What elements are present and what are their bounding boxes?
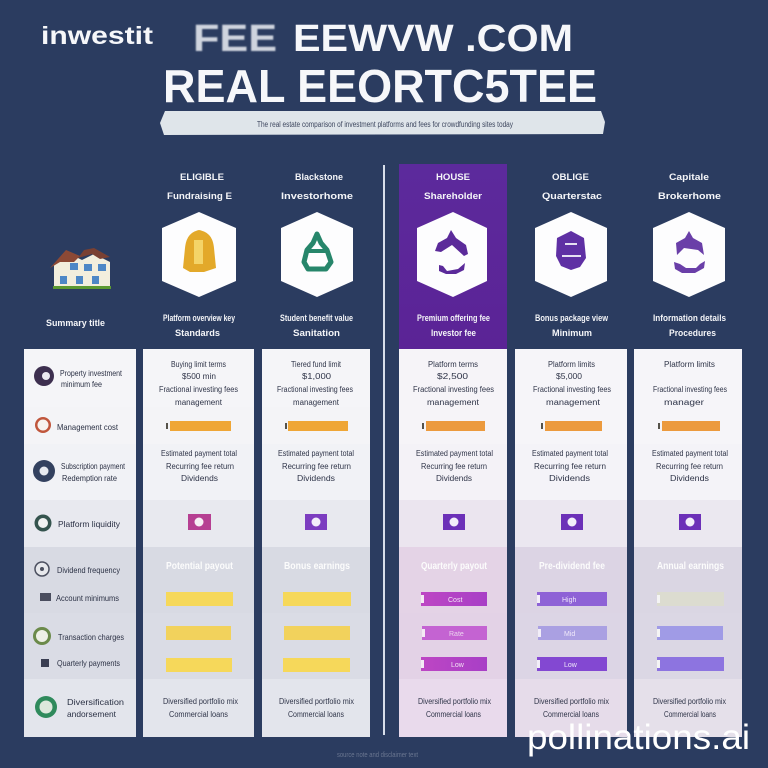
column one text rows: management [175, 398, 223, 407]
column two text rows: Diversified portfolio mix [279, 697, 354, 706]
faint footer note: source note and disclaimer text [337, 752, 418, 759]
subtitle banner [160, 111, 605, 135]
yellow bars column one [166, 592, 233, 672]
column four text rows: $5,000 [556, 372, 583, 381]
column one text rows: Commercial loans [169, 710, 228, 719]
column one text rows: Fractional investing fees [159, 385, 238, 394]
column four text rows: Diversified portfolio mix [534, 697, 609, 706]
column one text rows: Buying limit terms [171, 360, 226, 369]
column three text rows: management [427, 398, 480, 407]
column captions: Investor fee [431, 328, 476, 338]
column two text rows: Commercial loans [288, 710, 344, 719]
column two text rows: Tiered fund limit [291, 360, 342, 369]
magenta bars column three [421, 592, 487, 671]
column header: platform four: OBLIGE [552, 172, 589, 182]
row labels: Subscription payment [61, 461, 125, 471]
column captions: Standards [175, 328, 220, 338]
column four text rows: Recurring fee return [534, 462, 606, 471]
column captions: Procedures [669, 328, 716, 338]
column three text rows: Dividends [436, 474, 472, 483]
column three text rows: Diversified portfolio mix [418, 697, 491, 706]
title line one: EEWVW .COM [293, 18, 573, 60]
panel: column three [399, 349, 507, 737]
column header: platform four [542, 172, 602, 201]
column three text rows: Fractional investing fees [413, 385, 494, 394]
column header: platform one [167, 172, 232, 201]
column five text rows: Platform limits [664, 360, 715, 369]
column captions: Sanitation [293, 328, 340, 338]
row labels: Dividend frequency [57, 565, 121, 575]
row labels: Redemption rate [62, 473, 117, 483]
column captions: Student benefit value [280, 313, 353, 323]
row labels: Platform liquidity [58, 519, 121, 529]
magenta bars column three: Low [451, 662, 465, 669]
column three text rows: Commercial loans [426, 710, 481, 719]
pale and violet bars column five [657, 592, 724, 671]
column three text rows [413, 360, 494, 719]
column five text rows: Fractional investing fees [653, 385, 727, 394]
row labels: Transaction charges [58, 632, 124, 642]
row labels: Account minimums [56, 593, 119, 603]
column five text rows: Estimated payment total [652, 449, 728, 458]
column three text rows: Recurring fee return [421, 462, 487, 471]
panel: column five [634, 349, 742, 737]
column one text rows: Estimated payment total [161, 449, 237, 458]
column header: platform four: Quarterstac [542, 191, 602, 201]
column one text rows [159, 360, 238, 719]
column five text rows: Diversified portfolio mix [653, 697, 726, 706]
white headings in row five: Quarterly payout [421, 561, 488, 572]
column one text rows: Diversified portfolio mix [163, 697, 238, 706]
highlighted purple column header [399, 164, 507, 349]
hexagon icon: green badge [281, 212, 353, 297]
subtitle banner: The real estate comparison of investment platforms and fees for crowdfunding sites today [257, 120, 513, 129]
row labels: andorsement [67, 709, 117, 719]
violet bars column four: Mid [564, 631, 575, 638]
column five text rows: Dividends [670, 474, 709, 483]
title line two: REAL EEORTC5TEE [163, 60, 597, 112]
column header: platform three: Shareholder [424, 191, 483, 201]
column five text rows: manager [664, 398, 704, 407]
panel: column two [262, 349, 370, 737]
column header: platform three: HOUSE [436, 172, 470, 182]
panel: row label column [24, 349, 136, 737]
column two text rows: $1,000 [302, 372, 332, 381]
column header: platform two: Investorhome [281, 191, 353, 201]
column four text rows: Commercial loans [543, 710, 599, 719]
column captions: Premium offering fee [417, 313, 490, 323]
column four text rows: Dividends [549, 474, 590, 483]
column captions [163, 313, 726, 338]
vertical divider [383, 165, 385, 735]
hexagon icon: purple shield [535, 212, 607, 297]
orange fee bars [166, 421, 720, 431]
hexagon icon: purple arrows two [653, 212, 725, 297]
column two text rows: Recurring fee return [282, 462, 351, 471]
column header: platform five: Brokerhome [658, 191, 721, 201]
white headings in row five: Potential payout [166, 561, 234, 572]
column one text rows: Dividends [181, 474, 218, 483]
violet bars column four: Low [564, 662, 578, 669]
magenta bars column three: Cost [448, 597, 462, 604]
column two text rows: management [293, 398, 340, 407]
white headings in row five: Pre-dividend fee [539, 561, 605, 572]
panel: column one [143, 349, 254, 737]
column header: platform five: Capitale [669, 172, 709, 182]
column one text rows: $500 min [182, 372, 216, 381]
row labels: Diversification [67, 697, 124, 707]
column five text rows [652, 360, 728, 719]
watermark: pollinations.ai [527, 718, 750, 757]
column header: platform three [424, 172, 483, 201]
column header: platform one: ELIGIBLE [180, 172, 224, 182]
column four text rows [532, 360, 611, 719]
row label icons [33, 366, 57, 718]
column three text rows: Platform terms [428, 360, 478, 369]
column header: platform two: Blackstone [295, 172, 343, 182]
column header: platform two [281, 172, 353, 201]
row labels: minimum fee [61, 379, 102, 389]
column five text rows: Commercial loans [664, 710, 716, 719]
hexagon icon: gold bell [162, 212, 236, 297]
title line one: FEE [193, 18, 277, 60]
column three text rows: Estimated payment total [416, 449, 493, 458]
row labels: Property investment [60, 368, 123, 378]
white headings in row five: Bonus earnings [284, 561, 350, 572]
column captions: Platform overview key [163, 313, 235, 323]
column four text rows: management [546, 398, 601, 407]
icon: house [50, 248, 111, 289]
title line one [193, 18, 573, 60]
white headings in row five: Annual earnings [657, 561, 724, 572]
hexagon icon: purple arrows one [417, 212, 487, 297]
column two text rows: Estimated payment total [278, 449, 354, 458]
column four text rows: Platform limits [548, 360, 595, 369]
column two text rows [277, 360, 354, 719]
violet bars column four [537, 592, 607, 671]
row labels [56, 368, 125, 719]
column five text rows: Recurring fee return [656, 462, 723, 471]
column four text rows: Estimated payment total [532, 449, 608, 458]
column captions: Minimum [552, 328, 592, 338]
column four text rows: Fractional investing fees [533, 385, 611, 394]
column two text rows: Dividends [297, 474, 335, 483]
panel: column four [515, 349, 627, 737]
brand logo text: inwestit [41, 22, 154, 50]
column three text rows: $2,500 [437, 372, 469, 381]
column captions: Information details [653, 313, 726, 323]
row labels: Quarterly payments [57, 658, 120, 668]
purple status badges [188, 514, 701, 530]
column header: platform five [658, 172, 721, 201]
column captions: Bonus package view [535, 313, 609, 323]
column two text rows: Fractional investing fees [277, 385, 353, 394]
column one text rows: Recurring fee return [166, 462, 234, 471]
violet bars column four: High [562, 597, 577, 604]
row labels: Management cost [57, 422, 119, 432]
label under house icon: Summary title [46, 318, 105, 328]
column header: platform one: Fundraising E [167, 191, 232, 201]
magenta bars column three: Rate [449, 631, 464, 638]
yellow bars column two [283, 592, 351, 672]
white headings in row five [166, 561, 724, 572]
